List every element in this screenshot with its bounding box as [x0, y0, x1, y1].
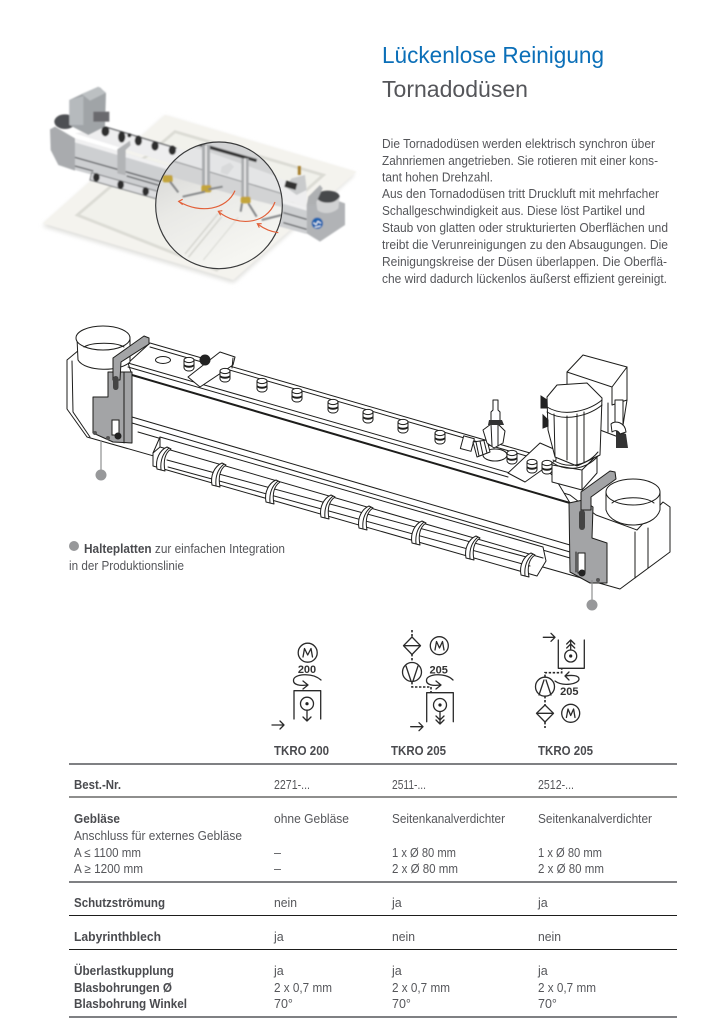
icon: TKRO 200 schematic: [272, 643, 321, 729]
back box: [567, 355, 628, 448]
icon: TKRO 205 top-feed schematic: 205: [430, 664, 448, 676]
row: Schutzströmung: ja: [391, 896, 402, 910]
row: Labyrinthblech: Labyrinthblech: [74, 930, 161, 944]
row: Überlastkupplung, Blasbohrungen: 70°: [274, 997, 293, 1011]
row: Gebläse: 1 x Ø 80 mm: [538, 846, 602, 860]
right duct: [606, 479, 660, 525]
row: Gebläse: 1 x Ø 80 mm: [392, 846, 456, 860]
intro text block: Schallgeschwindigkeit aus. Diese löst Partikel und: [382, 204, 645, 218]
row: Gebläse: Seitenkanalverdichter: [538, 812, 652, 826]
technical line drawing of the machine: [67, 326, 670, 610]
table: product data: [69, 744, 677, 1017]
callout marker 1 right: [586, 580, 598, 610]
lower rail: [132, 417, 570, 558]
row: Schutzströmung: [74, 896, 548, 910]
gearbox: [69, 87, 106, 135]
row: Schutzströmung: nein: [274, 896, 297, 910]
row: Gebläse: 2 x Ø 80 mm: [392, 862, 458, 876]
icon: TKRO 200 schematic: 200: [298, 664, 316, 676]
row: Gebläse: [74, 812, 652, 876]
row: Überlastkupplung, Blasbohrungen: 2 x 0,7 mm: [274, 981, 332, 995]
row: Labyrinthblech: nein: [538, 930, 561, 944]
row: Überlastkupplung, Blasbohrungen: 2 x 0,7 mm: [538, 981, 596, 995]
left holding plate: [93, 336, 149, 443]
intro text block: che wird dadurch lückenlos äußerst effizient gereinigt.: [382, 272, 667, 286]
icon: TKRO 205 top-feed schematic: [402, 630, 453, 731]
valve: [460, 400, 507, 461]
callout: Halteplatten: Halteplatten zur einfachen Integration: [84, 542, 285, 556]
row: Überlastkupplung, Blasbohrungen: ja: [537, 964, 548, 978]
orange rotation arcs: [179, 191, 278, 233]
nozzle bar: [90, 173, 160, 199]
row: Best.-Nr.: [74, 778, 574, 792]
right holding plate: [569, 471, 616, 583]
intro text block: tant hohen Drehzahl.: [382, 170, 493, 184]
row: Schutzströmung: Schutzströmung: [74, 896, 165, 910]
main body outline: [67, 350, 670, 589]
top knobs: [184, 354, 552, 474]
row: Gebläse: A ≥ 1200 mm: [74, 862, 143, 876]
row: Gebläse: 2 x Ø 80 mm: [538, 862, 604, 876]
row: Gebläse: A ≤ 1100 mm: [74, 846, 141, 860]
row: Gebläse: Gebläse: [74, 812, 120, 826]
valve: [295, 166, 304, 175]
motor: [541, 383, 602, 490]
door panel: [43, 115, 357, 283]
intro text block: Reinigungskreise der Düsen überlappen. Die Oberflä-: [382, 255, 667, 269]
knobs: [101, 126, 176, 155]
title: Lückenlose Reinigung: [382, 42, 604, 68]
intro text block: Die Tornadodüsen werden elektrisch synchron über: [382, 137, 655, 151]
row: Überlastkupplung, Blasbohrungen: Blasbohrungen Ø: [74, 981, 172, 995]
table column heads: TKRO 205: [538, 744, 593, 758]
row: Best.-Nr.: 2271-...: [274, 778, 310, 792]
callout marker 1 left: [96, 440, 106, 480]
row: Überlastkupplung, Blasbohrungen: ja: [273, 964, 284, 978]
row: Überlastkupplung, Blasbohrungen: Blasbohrung Winkel: [74, 997, 187, 1011]
product photo: machine over door panel with magnifier: [43, 87, 357, 283]
intro text block: treibt die Verunreinigungen zu den Absaugungen. Die: [382, 238, 668, 252]
row: Best.-Nr.: Best.-Nr.: [74, 778, 121, 792]
table column heads: TKRO 200: [274, 744, 329, 758]
nozzle bar: [153, 437, 546, 577]
row: Gebläse: Seitenkanalverdichter: [392, 812, 505, 826]
row: Überlastkupplung, Blasbohrungen: 2 x 0,7 mm: [392, 981, 450, 995]
row: Labyrinthblech: nein: [392, 930, 415, 944]
title: [382, 42, 604, 102]
row: Gebläse: –: [274, 846, 281, 860]
title: Tornadodüsen: [382, 76, 528, 102]
row: Labyrinthblech: ja: [273, 930, 284, 944]
row: Überlastkupplung, Blasbohrungen: Überlastkupplung: [74, 963, 174, 978]
intro text block: Staub von glatten oder strukturierten Oberflächen und: [382, 221, 668, 235]
intro text block: Aus den Tornadodüsen tritt Druckluft mit mehrfacher: [382, 187, 659, 201]
row: Überlastkupplung, Blasbohrungen: 70°: [392, 997, 411, 1011]
top surface: [128, 343, 570, 503]
icon: TKRO 205 bottom-feed schematic: [536, 633, 584, 728]
icon: TKRO 205 bottom-feed schematic: 205: [560, 686, 578, 698]
callout: Halteplatten: [69, 541, 285, 573]
intro text block: Zahnriemen angetrieben. Sie rotieren mit einer kons-: [382, 154, 658, 168]
callout: Halteplatten: in der Produktionslinie: [69, 559, 184, 573]
magnifier lens: [153, 133, 287, 269]
intro text block: [382, 137, 668, 286]
machine body: [50, 87, 345, 242]
row: Überlastkupplung, Blasbohrungen: 70°: [538, 997, 557, 1011]
left duct: [76, 326, 130, 369]
row: Best.-Nr.: 2512-...: [538, 778, 574, 792]
row: Labyrinthblech: [74, 930, 561, 944]
row: Überlastkupplung, Blasbohrungen: ja: [391, 964, 402, 978]
mounting plate right: [508, 443, 556, 482]
table column heads: TKRO 205: [391, 744, 446, 758]
row: Gebläse: ohne Gebläse: [274, 812, 349, 826]
row: Gebläse: Anschluss für externes Gebläse: [74, 829, 242, 843]
row: Gebläse: –: [274, 862, 281, 876]
table column heads: [274, 744, 593, 758]
row: Überlastkupplung, Blasbohrungen: [74, 963, 596, 1011]
mounting plate left: [188, 352, 235, 387]
row: Best.-Nr.: 2511-...: [392, 778, 426, 792]
row: Schutzströmung: ja: [537, 896, 548, 910]
